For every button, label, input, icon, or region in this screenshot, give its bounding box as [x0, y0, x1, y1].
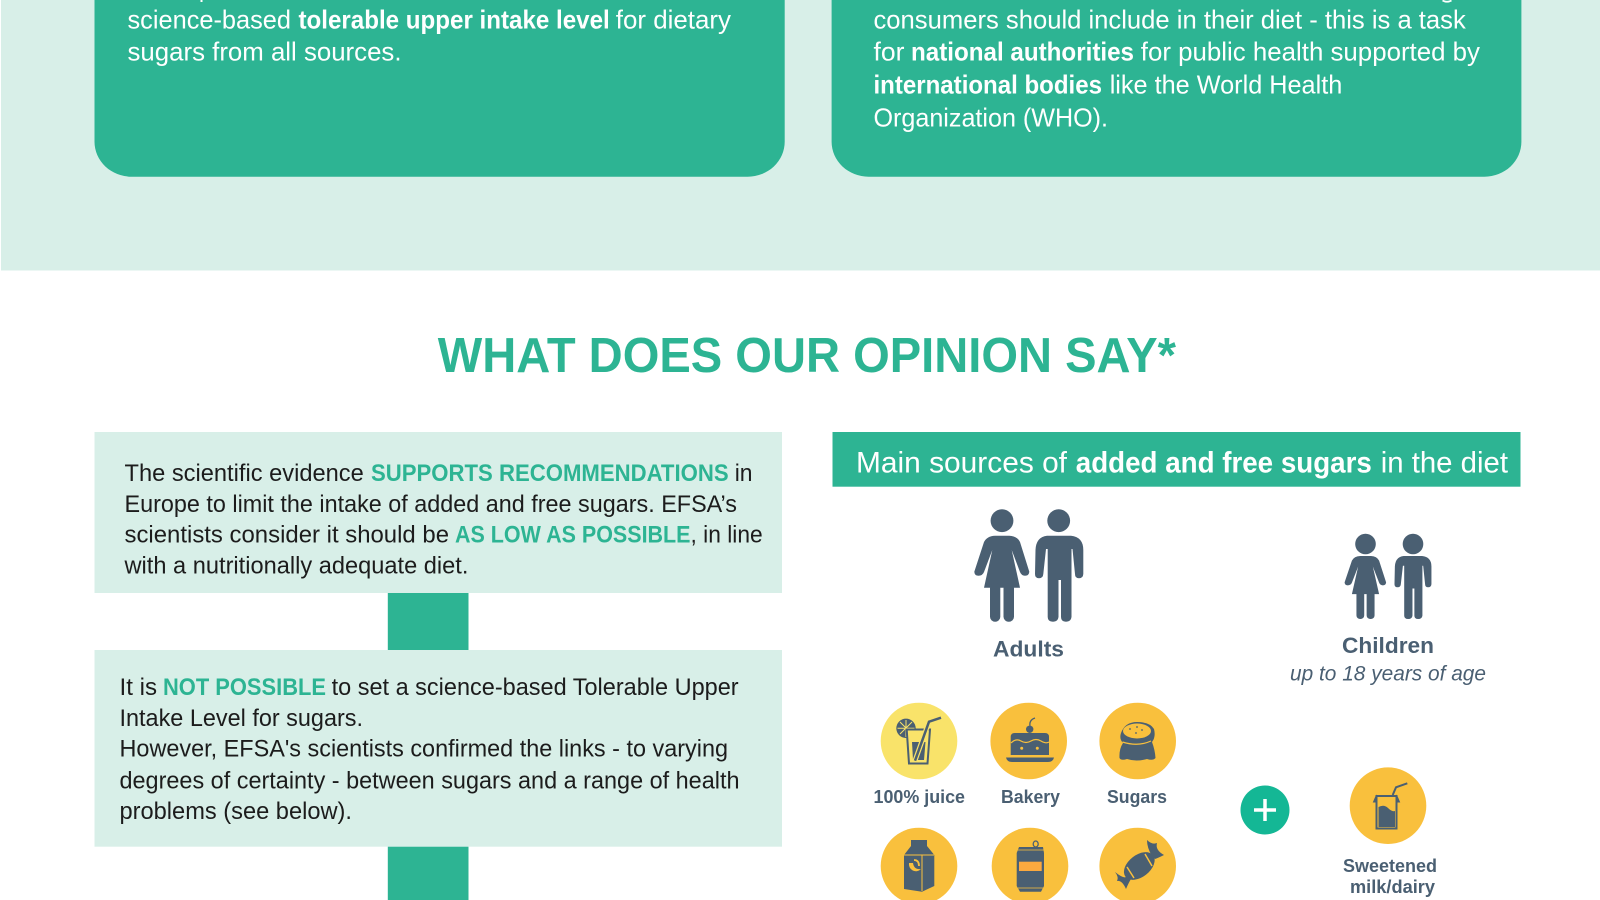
panel: right green card: like the World Health: [1110, 70, 1342, 100]
panel: recommendations text box: in: [735, 460, 752, 487]
label: children: Children: [1342, 633, 1434, 658]
panel: right green card: Organization (WHO).: [874, 103, 1108, 133]
panel: right green card: national authorities: [911, 37, 1134, 67]
panel: right green card: [832, 0, 1521, 177]
icon: bakery: [990, 703, 1067, 779]
panel: left green card: tolerable upper intake level: [298, 5, 610, 35]
panel: not possible text box: It is: [120, 674, 157, 701]
icon: adults: [974, 509, 1083, 622]
label: adults: Adults: [993, 637, 1064, 662]
panel: right green card: for: [874, 37, 905, 67]
icon: sweetened milk: [1350, 767, 1426, 844]
panel: recommendations text box: scientists consider it should be: [124, 522, 449, 549]
panel: recommendations text box: SUPPORTS RECOMMENDATIONS: [371, 460, 729, 487]
panel: left green card: [94, 0, 785, 177]
label: children: [1290, 633, 1486, 686]
panel: recommendations text box: with a nutritionally adequate diet.: [124, 552, 468, 579]
panel header: main sources: added and free sugars: [1076, 446, 1372, 479]
icon: plus: [1240, 786, 1290, 834]
panel: not possible text box: Intake Level for sugars.: [120, 705, 363, 732]
panel: left green card: science-based: [128, 5, 291, 35]
label: sweetened milk/dairy: [1343, 856, 1437, 897]
panel: recommendations text box: AS LOW AS POSSIBLE: [455, 522, 690, 549]
panel: not possible text box: [94, 650, 782, 847]
panel: not possible text box: degrees of certainty - between sugars and a range of health: [120, 767, 740, 794]
label: sweetened milk/dairy: Sweetened: [1343, 856, 1437, 876]
panel: not possible text box: to set a science-based Tolerable Upper: [332, 674, 739, 701]
label: sugars: Sugars: [1107, 787, 1167, 807]
panel: right green card: for public health supported by: [1141, 37, 1480, 67]
panel: left green card: sugars from all sources.: [128, 37, 402, 67]
label: children: up to 18 years of age: [1290, 662, 1486, 686]
panel: not possible text box: However, EFSA's scientists confirmed the links - to varying: [120, 736, 728, 763]
icon: sugars: [1099, 703, 1176, 779]
icon: candy: [1099, 828, 1176, 900]
icon: children: [1345, 534, 1431, 619]
panel: left green card: for dietary: [616, 5, 731, 35]
icon: 100% juice: [881, 703, 957, 779]
panel: right green card: international bodies: [874, 70, 1102, 100]
panel header: main sources: [832, 432, 1520, 487]
icon: soft drink can: [992, 828, 1068, 900]
panel: recommendations text box: Europe to limit the intake of added and free sugars. EFSA’s: [124, 491, 737, 518]
panel: right green card: consumers should include in their diet - this is a task: [874, 5, 1467, 35]
label: sweetened milk/dairy: milk/dairy: [1350, 877, 1435, 897]
panel: recommendations text box: The scientific evidence: [124, 460, 364, 487]
panel: recommendations text box: [94, 432, 782, 593]
panel: not possible text box: NOT POSSIBLE: [163, 674, 326, 701]
panel: recommendations text box: , in line: [690, 522, 763, 549]
connector: second stem: [388, 847, 468, 900]
panel header: main sources: Main sources of: [856, 446, 1068, 479]
label: 100% juice: 100% juice: [874, 787, 965, 807]
panel: not possible text box: problems (see below).: [120, 798, 352, 825]
label: bakery: Bakery: [1001, 787, 1060, 807]
panel: top band: [1, 0, 1600, 270]
panel header: main sources: in the diet: [1381, 446, 1509, 479]
icon: fruit juice carton: [881, 828, 957, 900]
connector: first stem: [388, 593, 468, 650]
heading: WHAT DOES OUR OPINION SAY*: [438, 328, 1177, 383]
